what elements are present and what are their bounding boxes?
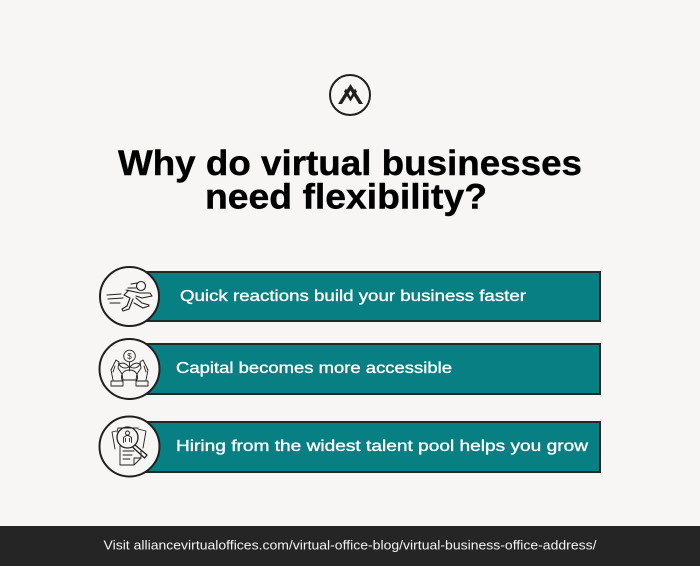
dollar sign: $ <box>127 352 132 361</box>
title: Why do virtual businesses <box>118 144 582 183</box>
item 1: quick reactions <box>100 267 600 326</box>
banner 2 text: Capital becomes more accessible <box>176 360 452 377</box>
item 2: capital <box>100 339 600 399</box>
footer bar <box>0 526 700 566</box>
item 3: hiring <box>100 416 600 476</box>
title: need flexibility? <box>205 178 487 216</box>
footer link text: Visit alliancevirtualoffices.com/virtual-office-blog/virtual-business-office-address/ <box>104 538 597 552</box>
logo <box>330 75 370 115</box>
banner 2 <box>140 344 600 394</box>
title <box>118 144 582 216</box>
icon: running person <box>100 267 159 326</box>
banner 1 text: Quick reactions build your business faster <box>180 288 526 305</box>
icon: resume under magnifier <box>100 416 160 476</box>
icon: hands with coin plant <box>100 339 160 399</box>
banner 3 <box>140 422 600 472</box>
banner 3 text: Hiring from the widest talent pool helps you grow <box>176 438 589 455</box>
banner 1 <box>140 272 600 321</box>
